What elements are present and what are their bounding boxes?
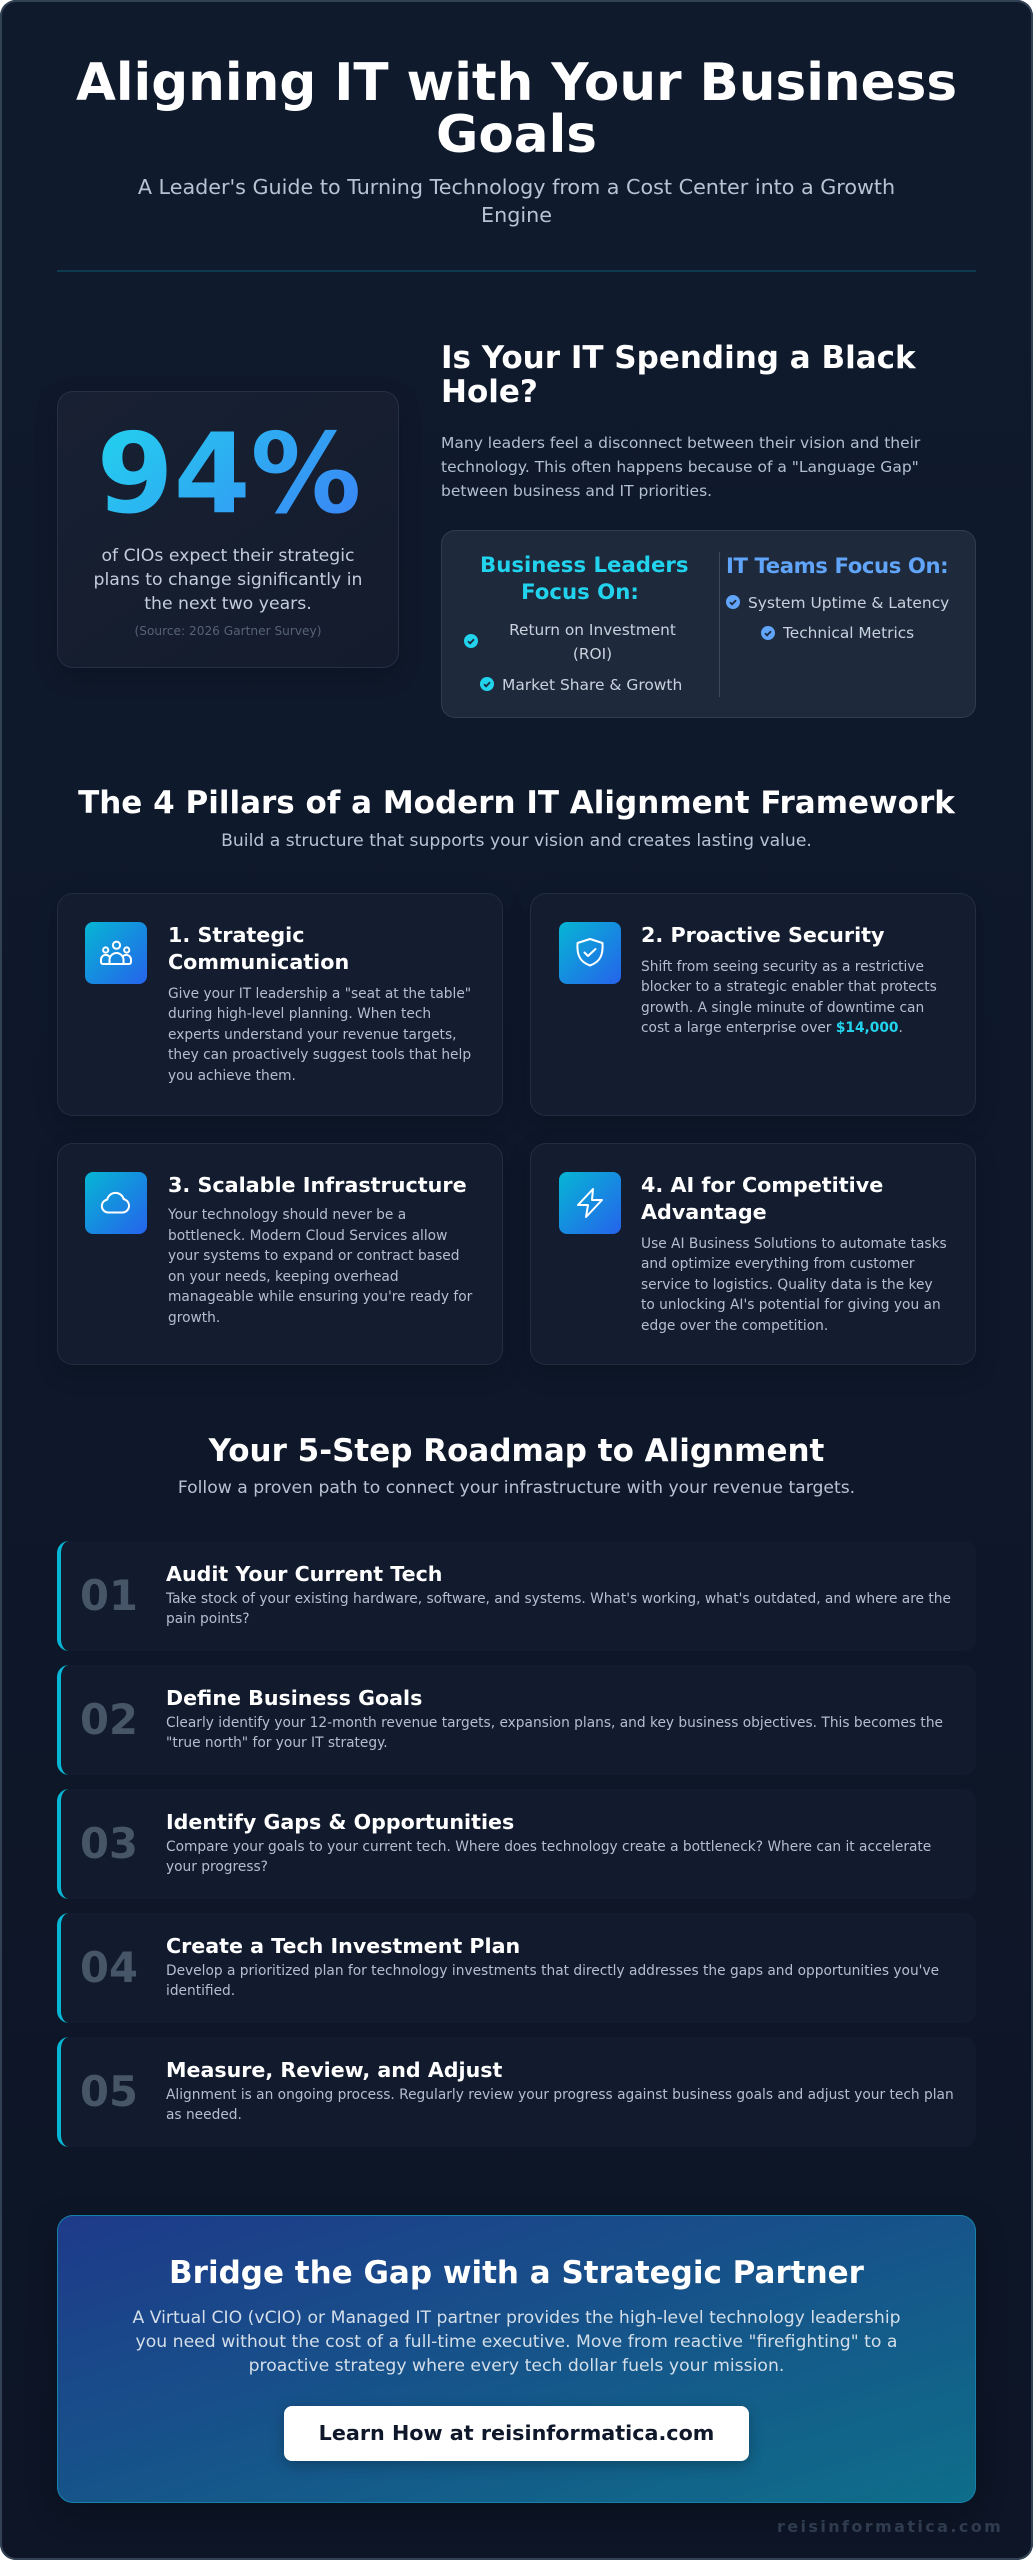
heading: business leaders: Focus On: <box>521 580 639 604</box>
list item: uptime: System Uptime & Latency <box>748 594 949 612</box>
big statistic: 94% <box>97 410 361 538</box>
pillar title: Advantage <box>641 1200 767 1224</box>
intro paragraph: between business and IT priorities. <box>441 482 712 500</box>
pillar title: Communication <box>168 950 349 974</box>
pillar text: experts understand your revenue targets, <box>168 1027 456 1043</box>
title <box>76 52 957 164</box>
pillar text: growth. A single minute of downtime can <box>641 1000 924 1016</box>
step title: Identify Gaps & Opportunities <box>166 1810 514 1834</box>
subtitle: Engine <box>481 202 552 226</box>
step text <box>166 1963 939 1999</box>
list item: ROI: (ROI) <box>573 645 612 663</box>
list item: metrics: Technical Metrics <box>783 624 914 642</box>
pillar title: 2. Proactive Security <box>641 923 885 947</box>
panel: pillar 3 <box>57 1143 503 1365</box>
intro paragraph: technology. This often happens because of a "Language Gap" <box>441 458 919 476</box>
heading: business leaders <box>480 552 689 604</box>
pillar text: you achieve them. <box>168 1068 296 1084</box>
heading: black hole: Hole? <box>441 374 538 410</box>
panel: language gap comparison <box>441 530 976 718</box>
pillar title <box>168 923 349 974</box>
heading: black hole <box>441 340 916 410</box>
CTA text <box>132 2308 901 2376</box>
step number: 04 <box>80 1943 138 1992</box>
source note: (Source: 2026 Gartner Survey) <box>135 624 321 638</box>
watermark: reisinformatica.com <box>777 2516 1003 2536</box>
heading: roadmap: Your 5-Step Roadmap to Alignment <box>209 1433 824 1469</box>
step text: your progress? <box>166 1859 268 1875</box>
step text <box>166 1839 931 1875</box>
heading: black hole: Is Your IT Spending a Black <box>441 340 916 376</box>
step number: 02 <box>80 1695 138 1744</box>
step text: Alignment is an ongoing process. Regularly review your progress against business goals and adjust your tech plan <box>166 2087 954 2103</box>
icon: check uptime <box>726 595 740 609</box>
subheading: roadmap: Follow a proven path to connect your infrastructure with your revenue targets. <box>178 1478 855 1498</box>
step 5 <box>57 2037 976 2147</box>
pillar text: they can proactively suggest tools that help <box>168 1047 471 1063</box>
CTA button <box>284 2406 749 2461</box>
step text: pain points? <box>166 1611 250 1627</box>
pillar text: and optimize everything from customer <box>641 1256 915 1272</box>
icon: check ROI <box>464 634 478 648</box>
icon: people <box>85 922 147 984</box>
title: Goals <box>436 104 597 164</box>
pillar text: edge over the competition. <box>641 1318 828 1334</box>
step title: Create a Tech Investment Plan <box>166 1934 520 1958</box>
CTA heading: Bridge the Gap with a Strategic Partner <box>169 2255 864 2291</box>
pillar text: bottleneck. Modern Cloud Services allow <box>168 1228 447 1244</box>
intro paragraph <box>441 434 920 500</box>
pillar text: during high-level planning. When tech <box>168 1006 431 1022</box>
pillar text: your systems to expand or contract based <box>168 1248 459 1264</box>
pillar text: to unlocking AI's potential for giving you an <box>641 1297 941 1313</box>
statistic description <box>93 546 362 614</box>
step text <box>166 2087 954 2123</box>
step text: as needed. <box>166 2107 242 2123</box>
pillar title <box>641 1172 883 1224</box>
panel: pillar 1 <box>57 893 503 1116</box>
subheading: four pillars: Build a structure that supports your vision and creates lasting value. <box>221 830 812 850</box>
statistic description: of CIOs expect their strategic <box>101 546 355 566</box>
step 1 <box>57 1541 976 1651</box>
step number: 05 <box>80 2067 138 2116</box>
icon: lightning bolt <box>559 1172 621 1234</box>
subtitle: A Leader's Guide to Turning Technology from a Cost Center into a Growth <box>138 175 895 199</box>
step text: "true north" for your IT strategy. <box>166 1735 388 1751</box>
pillar text: Use AI Business Solutions to automate tasks <box>641 1236 947 1252</box>
pillar text: Give your IT leadership a "seat at the table" <box>168 986 471 1002</box>
pillar text <box>641 958 937 1036</box>
step 3 <box>57 1789 976 1899</box>
pillar text <box>641 1236 947 1334</box>
list item: ROI: Return on Investment <box>509 621 676 639</box>
pillar text <box>168 986 471 1084</box>
step 4 <box>57 1913 976 2023</box>
pillar text: Your technology should never be a <box>168 1207 406 1223</box>
icon: check market share <box>480 677 494 691</box>
heading: IT teams: IT Teams Focus On: <box>726 552 948 578</box>
panel: pillar 2 <box>530 893 976 1116</box>
CTA text: you need without the cost of a full-time executive. Move from reactive "firefighting" to a <box>136 2332 897 2352</box>
CTA button: Learn How at reisinformatica.com <box>319 2421 714 2445</box>
pillar text: manageable while ensuring you're ready for <box>168 1289 472 1305</box>
panel: call to action <box>57 2215 976 2503</box>
list item: ROI <box>509 621 676 663</box>
pillar text <box>168 1207 472 1326</box>
panel: 94% statistic card <box>57 391 399 668</box>
pillar text: service to logistics. Quality data is the key <box>641 1277 933 1293</box>
step number: 01 <box>80 1571 138 1620</box>
step text: identified. <box>166 1983 235 1999</box>
step text <box>166 1591 951 1627</box>
step text: Clearly identify your 12-month revenue targets, expansion plans, and key business objectives. This becomes the <box>166 1715 943 1731</box>
heading: business leaders: Business Leaders <box>480 552 689 578</box>
step text: Compare your goals to your current tech. Where does technology create a bottleneck? Where can it accelerate <box>166 1839 931 1855</box>
pillar title: 1. Strategic <box>168 923 304 947</box>
step text <box>166 1715 943 1751</box>
statistic description: the next two years. <box>144 594 312 614</box>
pillar text: on your needs, keeping overhead <box>168 1269 399 1285</box>
icon: shield <box>559 922 621 984</box>
pillar text: growth. <box>168 1310 220 1326</box>
icon: check metrics <box>761 626 775 640</box>
step number: 03 <box>80 1819 138 1868</box>
CTA text: A Virtual CIO (vCIO) or Managed IT partner provides the high-level technology leadership <box>132 2308 901 2328</box>
title: Aligning IT with Your Business <box>76 52 957 112</box>
pillar title: 3. Scalable Infrastructure <box>168 1172 467 1196</box>
heading: four pillars: The 4 Pillars of a Modern IT Alignment Framework <box>78 785 955 821</box>
panel: pillar 4 <box>530 1143 976 1365</box>
CTA text: proactive strategy where every tech dollar fuels your mission. <box>249 2356 784 2376</box>
step text: Develop a prioritized plan for technology investments that directly addresses the gaps and opportunities you've <box>166 1963 939 1979</box>
statistic description: plans to change significantly in <box>93 570 362 590</box>
pillar text: blocker to a strategic enabler that protects <box>641 979 937 995</box>
step title: Define Business Goals <box>166 1686 422 1710</box>
pillar text: cost a large enterprise over $14,000. <box>641 1020 903 1036</box>
step 2 <box>57 1665 976 1775</box>
pillar title: 4. AI for Competitive <box>641 1172 883 1196</box>
step text: Take stock of your existing hardware, software, and systems. What's working, what's outdated, and where are the <box>166 1591 951 1607</box>
step title: Audit Your Current Tech <box>166 1562 442 1586</box>
subtitle <box>138 175 895 226</box>
step title: Measure, Review, and Adjust <box>166 2058 502 2082</box>
icon: cloud <box>85 1172 147 1234</box>
pillar text: Shift from seeing security as a restrictive <box>641 958 924 974</box>
list item: market share: Market Share & Growth <box>502 676 682 694</box>
intro paragraph: Many leaders feel a disconnect between their vision and their <box>441 434 920 452</box>
